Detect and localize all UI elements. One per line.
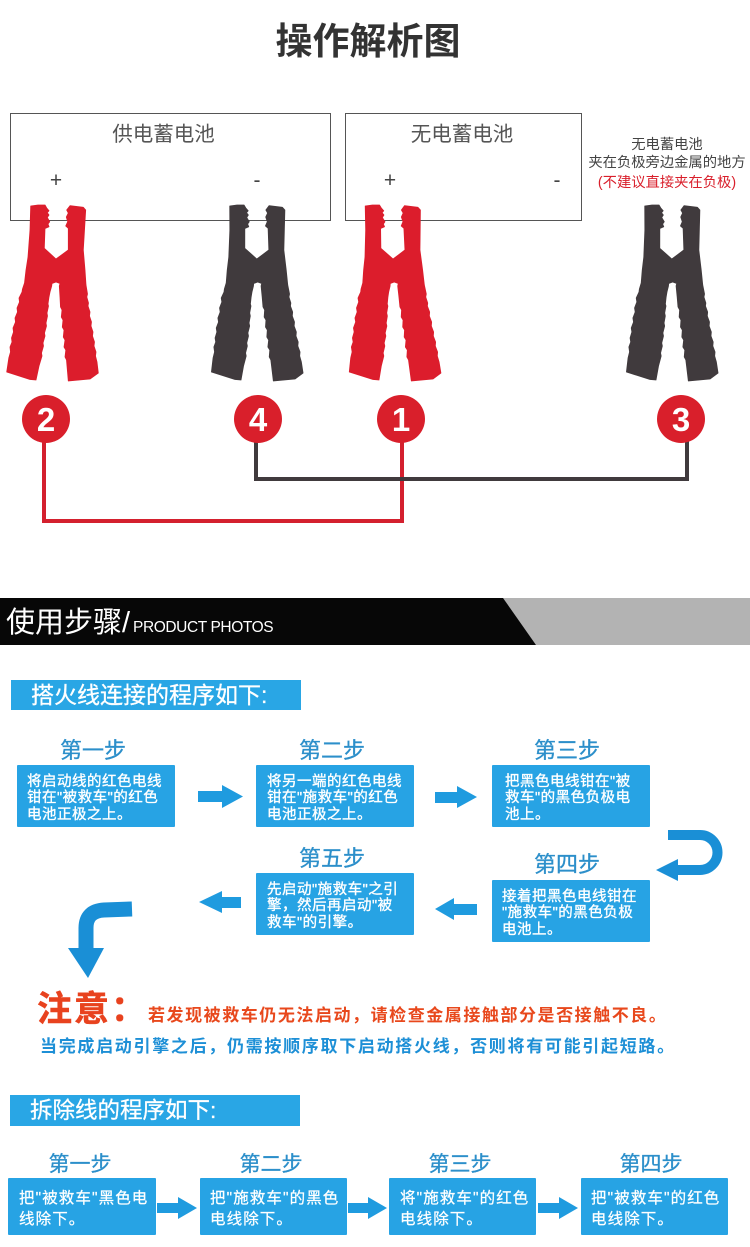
panel: dead battery: -: [554, 169, 560, 192]
callout: ground clamp note: [588, 136, 746, 191]
panel: dead battery: [346, 114, 582, 220]
title: 操作解析图: [276, 21, 460, 62]
removal step 1: [8, 1153, 156, 1235]
callout: ground clamp note: 夹在负极旁边金属的地方: [588, 154, 746, 171]
callout: ground clamp note: 无电蓄电池: [631, 136, 703, 153]
number badge 3: [657, 395, 705, 443]
red connecting cable: [44, 440, 402, 521]
step 2: 第二步: [299, 738, 365, 763]
number badge 2: [22, 395, 70, 443]
heading: removal procedure: 拆除线的程序如下:: [30, 1098, 216, 1123]
removal step 1: 把"被救车"黑色电: [19, 1189, 148, 1207]
step 3: 第三步: [534, 738, 600, 763]
number badge 4: 4: [249, 401, 268, 438]
removal step 3: 第三步: [428, 1153, 492, 1176]
removal step 3: 将"施救车"的红色: [400, 1189, 529, 1207]
removal step 3: 电线除下。: [400, 1210, 483, 1228]
step 4: [492, 852, 650, 942]
removal step 2: 第二步: [240, 1153, 302, 1176]
panel: dead battery: +: [384, 169, 396, 192]
panel: supplying battery: 供电蓄电池: [112, 123, 215, 146]
number badge 1: 1: [392, 401, 410, 438]
panel: supplying battery: +: [50, 169, 62, 192]
heading: connection procedure: 搭火线连接的程序如下:: [31, 682, 267, 708]
icon: red clamp right: [341, 205, 441, 381]
step 1: 将启动线的红色电线: [27, 773, 162, 790]
step 5: 先启动"施救车"之引: [267, 881, 398, 898]
removal step 1: 线除下。: [19, 1210, 85, 1228]
step 3: [492, 738, 650, 827]
removal step 4: 把"被救车"的红色: [591, 1189, 720, 1207]
removal step 2: 把"施救车"的黑色: [210, 1189, 339, 1207]
icon: black clamp far right: [621, 205, 718, 381]
removal step 4: 电线除下。: [591, 1210, 674, 1228]
step 1: 钳在"被救车"的红色: [27, 789, 158, 806]
arrow: step 4 to 5: [435, 898, 477, 920]
number badge 4: [234, 395, 282, 443]
number badge 1: [377, 395, 425, 443]
arrow: removal 3 to 4: [538, 1197, 578, 1219]
notice: 注意：: [37, 990, 148, 1029]
notice: 若发现被救车仍无法启动，请检查金属接触部分是否接触不良。: [148, 1005, 667, 1025]
step 2: 电池正极之上。: [267, 806, 372, 823]
removal step 4: [581, 1153, 728, 1235]
removal step 1: 第一步: [48, 1153, 112, 1176]
heading: removal procedure: [10, 1095, 300, 1126]
step 5: 擎，然后再启动"被: [267, 897, 393, 914]
number badge 2: 2: [37, 401, 55, 438]
step 3: 把黑色电线钳在"被: [505, 773, 631, 790]
arrow: removal 2 to 3: [348, 1197, 387, 1219]
removal step 2: [200, 1153, 347, 1235]
notice: 当完成启动引擎之后，仍需按顺序取下启动搭火线，否则将有可能引起短路。: [40, 1036, 676, 1056]
number badge 3: 3: [672, 401, 690, 438]
removal step 2: 电线除下。: [210, 1210, 293, 1228]
step 4: 电池上。: [502, 921, 562, 938]
arrow: step 5 to next: [199, 891, 241, 913]
step 5: 救车"的引擎。: [267, 914, 363, 931]
arrow: removal 1 to 2: [157, 1197, 197, 1219]
step 3: 池上。: [505, 806, 550, 823]
step 4: "施救车"的黑色负极: [502, 904, 633, 921]
panel: dead battery: 无电蓄电池: [411, 123, 513, 146]
section banner: PRODUCT PHOTOS: [133, 619, 273, 636]
panel: supplying battery: [10, 114, 330, 220]
arrow: step 2 to 3: [435, 786, 477, 808]
step 2: [256, 738, 414, 827]
arrow: step 3 to 4 curved: [656, 835, 718, 881]
step 5: [256, 846, 414, 935]
step 1: 第一步: [60, 738, 126, 763]
callout: ground clamp note: (不建议直接夹在负极): [598, 174, 736, 191]
panel: supplying battery: -: [254, 169, 260, 192]
step 4: 第四步: [534, 852, 600, 877]
step 2: 钳在"施救车"的红色: [267, 789, 398, 806]
notice: [37, 990, 676, 1056]
icon: black clamp left: [206, 205, 303, 381]
black connecting cable: [256, 440, 687, 479]
icon: red clamp left: [7, 205, 98, 381]
removal step 4: 第四步: [620, 1153, 682, 1176]
step 4: 接着把黑色电线钳在: [502, 888, 637, 905]
step 5: 第五步: [299, 846, 365, 871]
section banner: 使用步骤/: [6, 606, 131, 639]
removal step 3: [389, 1153, 536, 1235]
arrow: step 1 to 2: [198, 785, 243, 808]
step 1: 电池正极之上。: [27, 806, 132, 823]
step 1: [17, 738, 175, 827]
step 2: 将另一端的红色电线: [267, 773, 402, 790]
section banner: [0, 598, 750, 645]
step 3: 救车"的黑色负极电: [505, 789, 631, 806]
arrow: bent down to notice: [68, 909, 132, 978]
